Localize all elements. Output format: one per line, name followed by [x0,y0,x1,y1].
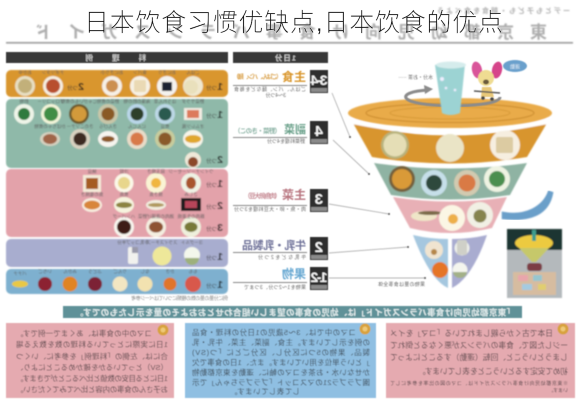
tier: fruit [413,235,448,288]
panel: staple foods: 食パン [133,69,147,76]
panel: staple foods: おにぎり小 [100,69,123,76]
middle column heading bar: 1日分 [274,52,296,62]
panel: side dishes: きんぴら [99,124,117,130]
text box: left pink: お子さんの食事の内容と比べてみてください。 [16,384,168,394]
panel: fruit: バナナ [13,271,27,277]
panel: main dishes: 2つ分 [206,200,223,212]
icon: dog mascot [470,61,504,101]
panel: main dishes: 豚肉の生姜焼 [177,213,204,220]
label: dairy: 牛乳・乳製品 [242,238,306,252]
text box: left pink: 1日に実際にとっている料理の数を数える場 [16,339,168,349]
label: dairy: 牛乳などを2つ分 [258,254,306,261]
callout: speech bubble [503,60,527,72]
mirrored header banner [6,6,573,44]
text box: left pink [6,323,174,398]
text box: right pink: ージした図で、食事のバランスが悪くなると倒れて [390,340,568,350]
mirrored header banner: ーデとも子ども・朝食を食べよう [437,6,570,15]
label: main dishes [233,187,307,213]
panel: main dishes: 鶏肉の唐揚げ野菜 [138,213,174,220]
panel: staple foods [6,69,228,97]
panel: main dishes: 焼き魚 [149,191,163,198]
panel: staple foods: 2つ分 [67,81,84,93]
label: main dishes: 主菜 [282,187,306,202]
panel: main dishes: 3つ分 [206,222,223,234]
tier: dairy [452,235,487,288]
panel: side dishes: 煮豆 [160,123,170,130]
tier: side dishes [374,163,527,200]
panel: staple foods: おかゆ [18,69,32,76]
connector lines: 果物の量は食事全体 [378,281,425,288]
panel: dairy: 1つ分 [206,251,223,263]
panel: dairy: ヨーグルト [181,239,203,246]
food group labels [233,69,307,291]
panel: side dishes: 野菜の煮物 [96,98,119,105]
arrow: curved blue band [503,192,552,219]
panel: main dishes: 魚の塩焼き [81,191,103,198]
panel: fruit: りんご [113,268,127,275]
badge 3 [310,189,328,212]
icon: medallion [158,324,168,336]
label: side dishes: 副菜 [284,122,306,136]
text box: middle blue: して表しています。 [230,386,300,396]
mirrored header banner: 東京都幼児向け食事バランスガイド [35,22,547,42]
badge 1-2: 1-2 [310,269,328,285]
panel: side dishes: 2つ分 [206,154,223,166]
panel: side dishes: 海藻の酢の物 [123,98,150,105]
panel: staple foods: ナポリタン [41,69,64,76]
photo: spinning top model [507,229,562,298]
serving number badges [310,70,328,290]
panel: staple foods: おにぎり [158,69,176,76]
text box: right pink: しまうということ、回転（運動）することによって [390,353,568,362]
caption under food panels: 例に分量の量の数の種類についてはページ参考 [131,295,228,302]
badge 3: 3 [315,191,323,208]
panel: side dishes: 野菜サラダ [181,98,204,105]
panel: side dishes: 1つ分 [206,109,223,121]
panel: fruit: なし [140,268,150,274]
panel: main dishes: ウインナーソーセージ [168,168,213,175]
panel: main dishes: 目玉焼き [147,168,165,175]
label: side dishes: 野菜料理を4つ分 [267,138,305,145]
panel: staple foods: 1つ分 [206,81,223,93]
title: 日本饮食习惯优缺点,日本饮食的优点 [84,9,503,37]
panel: side dishes: 酢物 [19,98,28,105]
text box: middle blue: コマの中では、3〜5歳児の1日分の料理・食品 [192,327,356,337]
connector lines [329,93,426,288]
panel: side dishes: にんじん [128,124,146,130]
icon: water glass [435,62,466,115]
panel: side dishes: ブロッコリー [37,98,64,104]
badge 4 [310,121,328,144]
panel: side dishes: かぼちゃの煮物 [34,123,66,130]
text box: right pink [386,323,575,398]
left column heading bar [6,52,228,63]
text box: right pink: 日本で古くから親しまれている「コマ」をイメ [390,328,553,338]
tier: main dishes [393,197,507,233]
icon: medallion [558,324,568,334]
middle column heading bar [233,52,328,63]
icon: rotation arrow around glass [406,85,500,106]
panel: main dishes [6,168,228,237]
panel: dairy: 牛乳コップ半分 [117,239,149,246]
bowl tier: staple foods [353,123,547,164]
text box: right pink: 初めて安定するということを表しています。 [418,366,568,376]
panel: side dishes [6,98,228,168]
text box: left pink: 合には、左側の「料理例」を参考に、いくつ [16,351,168,361]
text box: middle blue: 園ブラブラ21のマスコット「ブラブラちゃん」で示 [192,377,370,387]
callout: speech bubble: 運動 [510,64,520,70]
panel: staple foods: ごはん [186,69,200,76]
panel: dairy: スライスチーズ [146,239,178,246]
label: staple foods: （ごはん、パン、麺） [233,73,282,81]
panel: main dishes: さしみ [184,191,198,198]
label: staple foods: 主食 [282,69,306,84]
text box: middle blue: かせない水・お茶をコマの軸に、運動を東京都動物 [192,367,370,377]
label: fruit [233,266,307,291]
bowl rim [348,98,552,134]
text box: left pink: コマの中の食事は、あくまで一例です。 [16,328,152,338]
label: staple foods: 3〜4つ分 [265,92,286,99]
label: staple foods: ごはん、パン、麺などを毎食 [234,86,306,93]
label: main dishes: （肉魚卵大豆） [244,191,281,200]
teal statement banner: 「東京都幼児向け食事バランスガイド」は、幼児の食事の望ましい組合わせとおおよその量を示したものです。 [75,308,515,318]
label: fruit: 果物 [282,266,306,281]
badge 3-4: 3-4 [310,72,328,88]
badge 4: 4 [314,123,323,140]
panel: fruit [6,268,228,294]
text box: right pink: います。 [548,388,568,394]
label: main dishes: 肉・魚・卵・大豆料理を3つ分 [234,206,306,213]
panel: fruit: かき [166,268,174,275]
text box: middle blue: 」という単位を用いています。また、1日の食事で欠 [192,357,370,367]
label: staple foods [233,69,307,99]
panel: fruit: もも [188,269,198,274]
panel: side dishes: ほうれん草 [153,98,176,105]
text box: right pink: ※東京都幼児向け食事バランスガイドは、コマの図の比率を参考にして [390,380,568,387]
text box: middle blue: の例を示しています。主食、副菜、主菜、牛乳・乳 [192,337,370,347]
panel: fruit: みかん [63,268,77,275]
panel: main dishes: 納豆 [87,168,96,175]
label: side dishes: （野菜・きのこ） [234,126,281,135]
panel: side dishes: きのこソテー [66,124,94,130]
panel: main dishes: 煮魚 [119,191,128,198]
text box: left pink: （SV）とっているかを確かめることにより、 [16,362,168,372]
panel: dairy [6,239,228,267]
panel: fruit: ぶどう [88,268,102,275]
badge 1-2 [310,267,328,290]
text box: left pink: 1日にとる目安の数値と比べることができます。 [16,373,168,383]
panel: fruit: いちご [38,268,52,275]
text box: middle blue: 製品、果物の5つに区分し、区分ごとに「つ(SV) [192,347,370,357]
panel: main dishes: 冷奴 [119,168,128,175]
panel: fruit: 1つ分 [206,279,223,291]
water label: 水分・お茶 ····· [398,74,433,81]
label: dairy [233,238,307,261]
left column heading bar: 料理例 [66,52,146,62]
label: side dishes [233,122,307,145]
food pyramid [348,98,552,288]
text box: middle blue [185,323,376,398]
icon: medallion [360,324,370,334]
panel: side dishes: オムレツ風 [181,124,204,130]
panel: main dishes: 1つ分 [206,178,223,190]
panel: side dishes: じゃがいもの煮物 [61,98,97,105]
badge 2: 2 [315,239,323,256]
panel: main dishes: ハンバーグ [112,213,135,220]
badge 3-4 [310,70,328,93]
label: fruit: 果物を1〜2つ分、3つまで [244,284,306,291]
badge 2 [310,237,328,260]
